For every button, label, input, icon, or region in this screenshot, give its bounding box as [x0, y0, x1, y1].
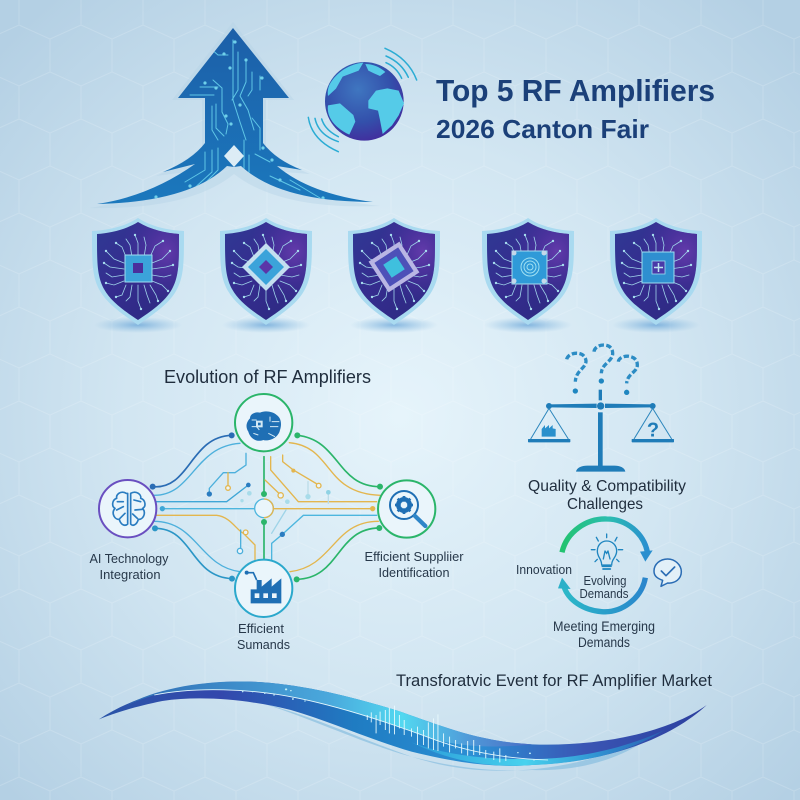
label: Efficient Sumands: Efficient [238, 621, 284, 636]
node: gear magnifier [378, 480, 435, 538]
label: Quality & Compatibility Challenges [528, 478, 686, 513]
shield 3: rotated chip [348, 218, 440, 333]
label: Quality & Compatibility Challenges: Challenges [567, 496, 643, 513]
title: 2026 Canton Fair [436, 114, 649, 144]
label: Efficient Suppliier Identification: Identification [378, 565, 450, 580]
label: AI Technology Integration: Integration [100, 567, 160, 582]
shield 1: square chip [92, 218, 184, 333]
label: Innovation: Innovation [516, 562, 572, 577]
label: Meeting Emerging Demands: Demands [578, 635, 630, 650]
label: Evolving Demands [580, 573, 629, 601]
node: AI brain [99, 480, 156, 537]
label: Evolving Demands: Demands [580, 586, 629, 601]
node: chip brain [235, 394, 292, 451]
icon: balance scale with question marks [528, 345, 674, 472]
icon: globe with signal waves [308, 48, 417, 152]
title: Top 5 RF Amplifiers [436, 73, 715, 108]
circuit network diagram [99, 394, 435, 617]
label: AI Technology Integration [90, 551, 169, 582]
heading: Evolution of RF Amplifiers: Evolution of RF Amplifiers [164, 366, 371, 387]
beam and stand [528, 390, 674, 472]
label: Efficient Sumands: Sumands [237, 637, 290, 652]
icon: light bulb [591, 534, 623, 569]
label: Meeting Emerging Demands: Meeting Emerging [553, 619, 655, 634]
central hub [255, 499, 273, 518]
shield 4: round-core chip [482, 218, 574, 333]
innovation cycle [558, 519, 681, 612]
shield 5: grid chip [610, 218, 702, 333]
signal wave ribbon [99, 681, 707, 771]
label: Meeting Emerging Demands [553, 619, 655, 650]
label: Transforatvic Event for RF Amplifier Market: Transforatvic Event for RF Amplifier Market [396, 671, 712, 690]
label: Quality & Compatibility Challenges: Quality & Compatibility [528, 478, 686, 495]
right pan question: ? [647, 419, 659, 441]
label: Efficient Suppliier Identification [364, 549, 464, 580]
question marks [567, 345, 637, 383]
icon: circuit up arrow [90, 22, 380, 208]
label: Efficient Sumands [237, 621, 290, 652]
label: Evolving Demands: Evolving [584, 573, 626, 588]
title [436, 73, 715, 144]
label: Efficient Suppliier Identification: Efficient Suppliier [364, 549, 464, 564]
label: AI Technology Integration: AI Technology [90, 551, 169, 566]
icon: speech bubble check [654, 559, 681, 586]
node: factory [235, 560, 292, 617]
left pan factory [542, 425, 556, 437]
shield 2: diamond chip [220, 218, 312, 333]
